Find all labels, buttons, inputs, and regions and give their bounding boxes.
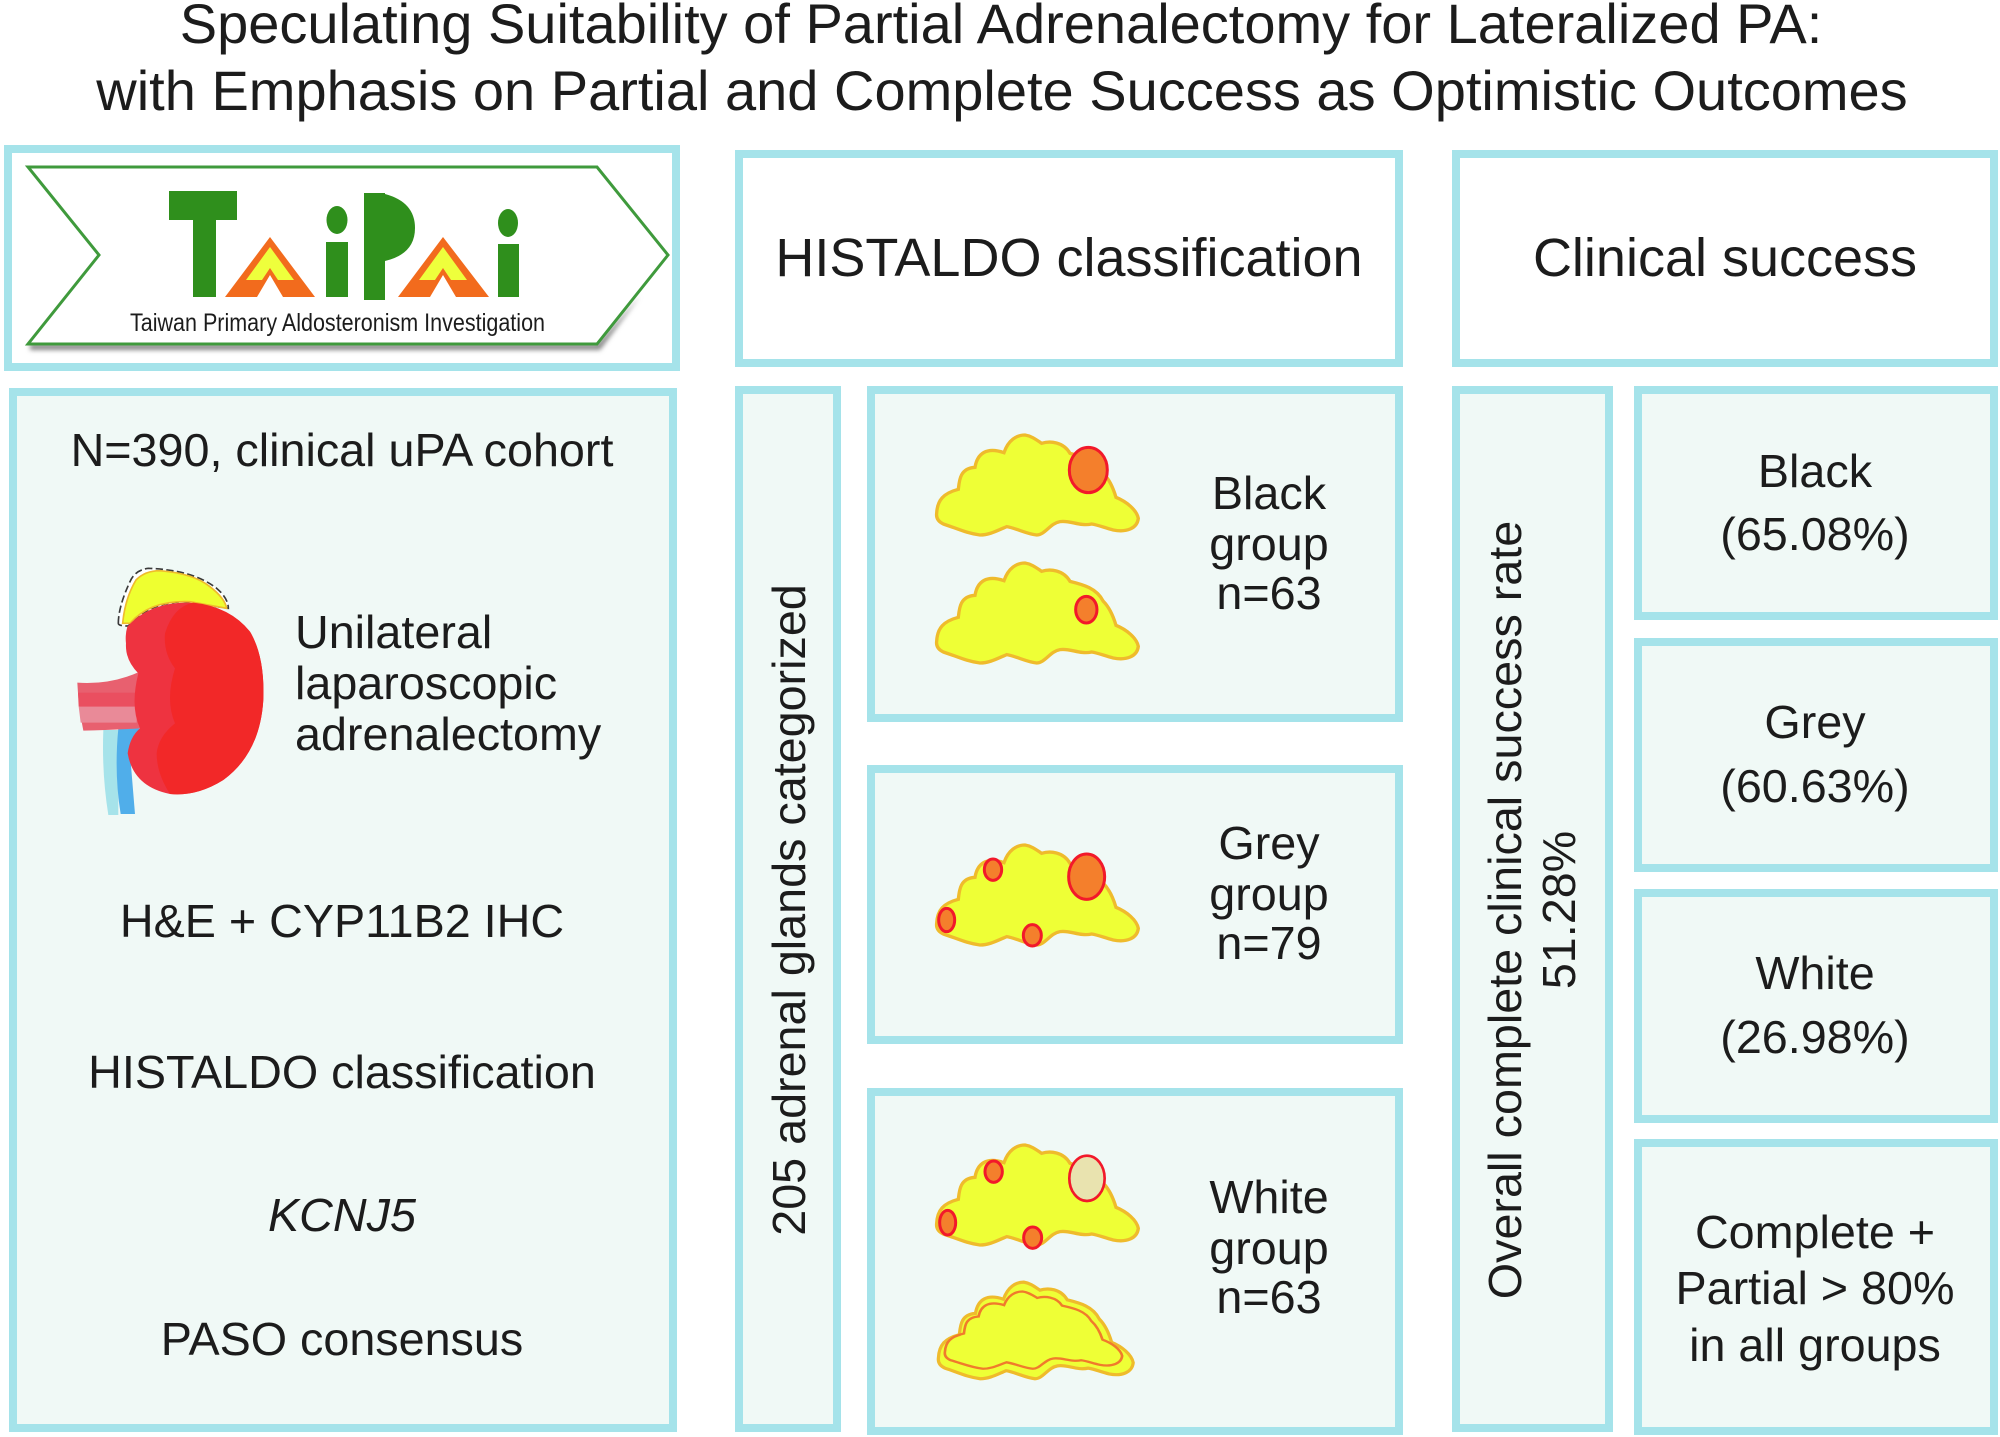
panel: Grey result	[1638, 642, 1994, 868]
gene text: KCNJ5	[268, 1189, 417, 1241]
cohort text: N=390, clinical uPA cohort	[71, 424, 613, 476]
procedure text	[295, 606, 602, 760]
staining text: H&E + CYP11B2 IHC	[120, 895, 564, 947]
panel: TAIPAI logo	[8, 149, 676, 367]
panel: White result	[1638, 893, 1994, 1119]
panel: White result: White	[1755, 947, 1875, 999]
panel: Black result: (65.08%)	[1720, 508, 1910, 560]
consensus text: PASO consensus	[161, 1313, 523, 1365]
panel: adrenal glands categorized: 205 adrenal glands categorized	[763, 584, 815, 1236]
panel: overall success rate	[1456, 390, 1609, 1428]
panel: Black group	[871, 390, 1399, 718]
panel: Black result	[1638, 390, 1994, 616]
gland with diffuse hyperplasia	[938, 1282, 1133, 1379]
panel: Grey result: (60.63%)	[1720, 760, 1910, 812]
classification text: HISTALDO classification	[88, 1046, 596, 1098]
group label: Black	[1212, 467, 1327, 519]
group label: n=79	[1216, 917, 1322, 969]
icon: kidney and adrenal gland	[77, 568, 263, 815]
title: with Emphasis on Partial and Complete Success as Optimistic Outcomes	[95, 59, 1908, 122]
group label: group	[1209, 868, 1329, 920]
panel: overall success rate: Overall complete clinical success rate	[1479, 521, 1531, 1299]
panel: complete plus partial: in all groups	[1689, 1319, 1941, 1371]
group label: White	[1209, 1171, 1329, 1223]
panel: Clinical success heading	[1456, 154, 1994, 363]
gland with pale large nodule	[937, 1145, 1138, 1248]
panel: complete plus partial: Partial > 80%	[1676, 1262, 1954, 1314]
gland with small nodule	[937, 563, 1138, 663]
procedure text: Unilateral	[295, 606, 492, 658]
panel: HISTALDO heading	[739, 154, 1399, 363]
procedure text: laparoscopic	[295, 657, 557, 709]
panel: Grey result: Grey	[1764, 696, 1866, 748]
logo wordmark	[169, 191, 519, 300]
group label: Grey	[1218, 817, 1320, 869]
panel: Clinical success heading: Clinical success	[1533, 228, 1917, 288]
gland with large nodule	[937, 435, 1138, 535]
gland with multiple nodules	[937, 845, 1138, 946]
panel: cohort and methods	[13, 392, 673, 1428]
group label: n=63	[1216, 567, 1322, 619]
logo chevron	[28, 167, 668, 344]
group label: n=63	[1216, 1271, 1322, 1323]
panel: adrenal glands categorized	[739, 390, 837, 1428]
panel: Grey group	[871, 769, 1399, 1040]
group label	[1209, 467, 1329, 619]
panel: HISTALDO heading: HISTALDO classification	[775, 228, 1363, 288]
group label	[1209, 1171, 1329, 1323]
panel: White result: (26.98%)	[1720, 1011, 1910, 1063]
group label: group	[1209, 1222, 1329, 1274]
panel: overall success rate: 51.28%	[1533, 831, 1585, 989]
panel: complete plus partial: Complete +	[1695, 1206, 1935, 1258]
panel: White group	[871, 1092, 1399, 1431]
logo subtitle: Taiwan Primary Aldosteronism Investigation	[130, 309, 545, 337]
group label: group	[1209, 518, 1329, 570]
procedure text: adrenalectomy	[295, 708, 602, 760]
panel: Black result: Black	[1758, 445, 1873, 497]
group label	[1209, 817, 1329, 969]
panel: complete plus partial	[1638, 1143, 1994, 1431]
title	[95, 0, 1908, 122]
